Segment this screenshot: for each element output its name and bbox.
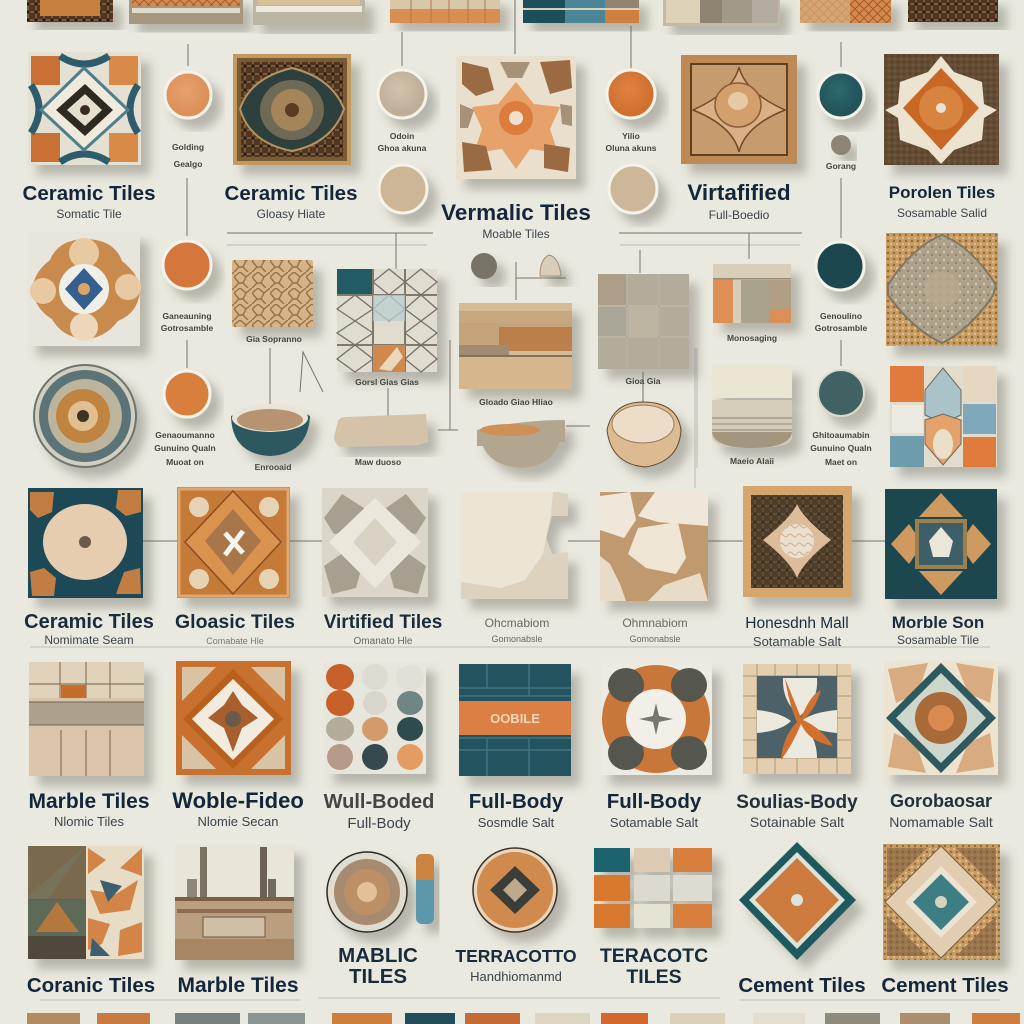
row 4 tile: orange faceted star	[177, 487, 290, 598]
row 1 labels: Full-Boedio	[709, 208, 770, 222]
row 6 pill sample	[416, 854, 434, 924]
row 4 labels: Morble Son	[892, 613, 984, 632]
row 1 swatches: lower tan pair	[379, 165, 657, 213]
row 4 labels: Virtified Tiles	[324, 612, 442, 633]
row 5 labels: Full-Body	[469, 790, 564, 813]
row 5 labels: Wull-Boded	[324, 791, 434, 813]
row 2 small captions	[161, 311, 867, 407]
row 6 bricks	[594, 848, 712, 928]
row 4 tile: cream and brown stone	[600, 492, 708, 601]
row 2 tile: orange and tan blocks	[713, 264, 791, 323]
row 1 labels: Moable Tiles	[482, 227, 550, 241]
row 3: decorative plate	[34, 365, 136, 467]
row 3 tile: mosaic	[890, 366, 997, 467]
row 6 labels: MABLIC	[338, 944, 418, 967]
row 5 tile: marble bricks	[29, 662, 144, 776]
row 4 labels: Honesdnh Mall	[745, 615, 849, 632]
row 3 stacked slabs	[712, 365, 792, 448]
row 4 labels: Ohmnabiom	[622, 616, 688, 630]
row 2 tile: wood-like strata	[459, 303, 572, 389]
small grey swatch	[831, 135, 851, 155]
top strip of cropped tiles	[27, 0, 998, 26]
row 2 small captions: Ganeauning	[162, 311, 212, 321]
row 1 labels: Oluna akuns	[605, 143, 657, 153]
row 4 labels: Comabate Hle	[206, 636, 264, 646]
row 6 ornate tile	[883, 844, 1000, 960]
row 5 labels	[28, 788, 993, 832]
row 4 labels: Gloasic Tiles	[175, 611, 295, 633]
row 4 tile: grey cream star	[322, 488, 428, 597]
row 3 swatch: orange	[164, 371, 210, 417]
row 3 swatch: dark teal pattern	[818, 370, 864, 416]
row 2 small captions: Gotrosamble	[161, 323, 213, 333]
row 2 tile: grey grid	[598, 274, 689, 369]
row 3 captions	[154, 430, 872, 472]
row 3 captions: Gunuino Qualn	[154, 443, 216, 453]
row 1 swatch: tan	[378, 70, 426, 118]
row 5 labels: Marble Tiles	[28, 790, 150, 813]
row 2 tile: tan cracked weave	[232, 260, 313, 327]
row 4 labels	[24, 611, 984, 649]
row 4 labels: Gomonabsle	[629, 634, 681, 644]
row 6 labels: TILES	[349, 965, 407, 988]
row 1 swatch: burnt orange	[607, 70, 655, 118]
row 3 captions: Enrooaid	[255, 462, 291, 472]
row 5 tile: orange with white diamond	[176, 661, 291, 775]
row 4 labels: Gomonabsle	[491, 634, 543, 644]
row 6 diamond tile	[739, 842, 856, 960]
row 6 labels	[27, 944, 1009, 997]
row 1 labels	[23, 131, 995, 241]
row 4 labels: Sotamable Salt	[753, 634, 841, 649]
row 6 labels: Cement Tiles	[881, 974, 1009, 997]
row 1 labels: Ghoa akuna	[378, 143, 427, 153]
row 5 labels: Sotamable Salt	[610, 815, 698, 830]
row 4 labels: Nomimate Seam	[44, 633, 134, 647]
row 5 labels: Soulias-Body	[736, 792, 858, 813]
bottom strip of cropped tiles	[27, 1013, 1020, 1024]
row 2 small captions: Gorsl Gias Gias	[355, 377, 419, 387]
row 3 captions: Ghitoaumabin	[812, 430, 870, 440]
row 5 tile: teal diamond on cream	[884, 661, 998, 775]
row 1 labels: Somatic Tile	[56, 207, 122, 221]
row 1 labels: Yilio	[622, 131, 640, 141]
row 2 tile: cream with orange and blue flower	[28, 232, 141, 346]
row 3 captions: Muoat on	[166, 457, 204, 467]
row 4 tile: broken cream stone	[461, 492, 568, 599]
row 5 labels: Sotainable Salt	[750, 814, 844, 830]
row 6 round knot tile	[473, 848, 557, 932]
row 6 labels: Handhiomanmd	[470, 969, 562, 984]
row 1 labels: Gloasy Hiate	[257, 207, 326, 221]
row 3 captions: Maeio Alaii	[730, 456, 774, 466]
row 5 labels: Nlomic Tiles	[54, 814, 125, 829]
row 4 labels: Sosamable Tile	[897, 633, 979, 647]
row 4 labels: Omanato Hle	[354, 636, 413, 647]
row 5 labels: Nomamable Salt	[889, 814, 993, 830]
row 4 tile: framed tan lace	[743, 486, 852, 597]
row 5 labels: Gorobaosar	[890, 791, 992, 811]
row 5 labels: Sosmdle Salt	[478, 815, 555, 830]
row 3 bowl: dark teal	[231, 404, 310, 456]
row 2 small samples	[471, 253, 561, 279]
row 2 small captions: Gioa Gia	[626, 376, 661, 386]
row 1 labels: Vermalic Tiles	[441, 200, 591, 225]
row 6 tile: patchwork	[28, 846, 144, 959]
row 5 tile: geometric teal orange	[743, 664, 851, 774]
row 1 labels: Ceramic Tiles	[23, 182, 155, 205]
row 6 labels: TERRACOTTO	[455, 946, 577, 966]
row 6 disc sample	[327, 852, 407, 932]
row 6 labels: Marble Tiles	[178, 974, 298, 997]
row 1 labels: Ceramic Tiles	[225, 182, 357, 205]
row 1 tile: dark with orange star	[884, 54, 999, 165]
row 5 tile: pebble grid	[325, 662, 426, 774]
row 1 labels: Porolen Tiles	[889, 183, 995, 202]
row 5 labels: Full-Body	[607, 790, 702, 813]
row 5 tile: teal with orange band	[459, 664, 571, 776]
row 6 labels: TERACOTC	[600, 945, 708, 967]
band lettering: OOBILE	[490, 711, 540, 726]
row 6 labels: Cement Tiles	[738, 974, 866, 997]
row 2 tile: speckled tan lattice	[886, 233, 998, 346]
row 1 labels: Odoin	[390, 131, 414, 141]
row 2 swatch: dark teal	[816, 242, 864, 290]
row 3 captions: Maet on	[825, 457, 857, 467]
row 1 labels: Golding	[172, 142, 204, 152]
row 4 tile: dark teal with tan diamonds	[885, 489, 997, 599]
row 1 swatch: orange	[165, 72, 211, 118]
row 3 captions: Genaoumanno	[155, 430, 215, 440]
row 1 swatch: teal	[818, 72, 864, 118]
row 5 labels: Nlomie Secan	[198, 814, 278, 829]
row 2 small captions: Gia Sopranno	[246, 334, 302, 344]
row 2 small captions: Gloado Giao Hliao	[479, 397, 553, 407]
row 5 labels: Woble-Fideo	[172, 788, 304, 813]
row 5 labels: Full-Body	[347, 815, 411, 832]
row 1 tile: tan wood frame	[681, 55, 797, 164]
row 4 tile: teal with peach medallion	[28, 488, 143, 598]
row 1 tile: cream and orange scatter	[456, 56, 576, 179]
row 6 labels: TILES	[626, 966, 682, 988]
row 1 labels: Sosamable Salid	[897, 206, 987, 220]
row 1 labels: Gealgo	[174, 159, 202, 169]
row 1 tile: dark brown medallion	[233, 54, 351, 165]
row 4 labels: Ceramic Tiles	[24, 611, 154, 633]
row 3 roll of clay	[334, 414, 428, 447]
row 1 labels: Gorang	[826, 161, 856, 171]
row 1 labels: Virtafified	[687, 180, 791, 205]
row 2 small captions: Monosaging	[727, 333, 777, 343]
row 3 bowl: cream	[607, 402, 681, 467]
row 2 small captions: Genoulino	[820, 311, 862, 321]
row 3 captions: Gunuino Qualn	[810, 443, 872, 453]
row 1 tile: ceramic cream, teal and orange	[28, 52, 141, 165]
row 6 tile: wooden cabinet	[175, 845, 294, 960]
row 2 swatch: orange with text band	[163, 241, 211, 289]
row 2 small captions: Gotrosamble	[815, 323, 867, 333]
row 5 tile: ornate ring	[601, 663, 712, 775]
row 3 captions: Maw duoso	[355, 457, 401, 467]
row 3 bowl: stone with band	[477, 420, 565, 468]
row 6 labels: Coranic Tiles	[27, 974, 155, 997]
row 4 labels: Ohcmabiom	[485, 616, 549, 630]
row 2 tile: cream grid with teal cell	[337, 269, 437, 372]
